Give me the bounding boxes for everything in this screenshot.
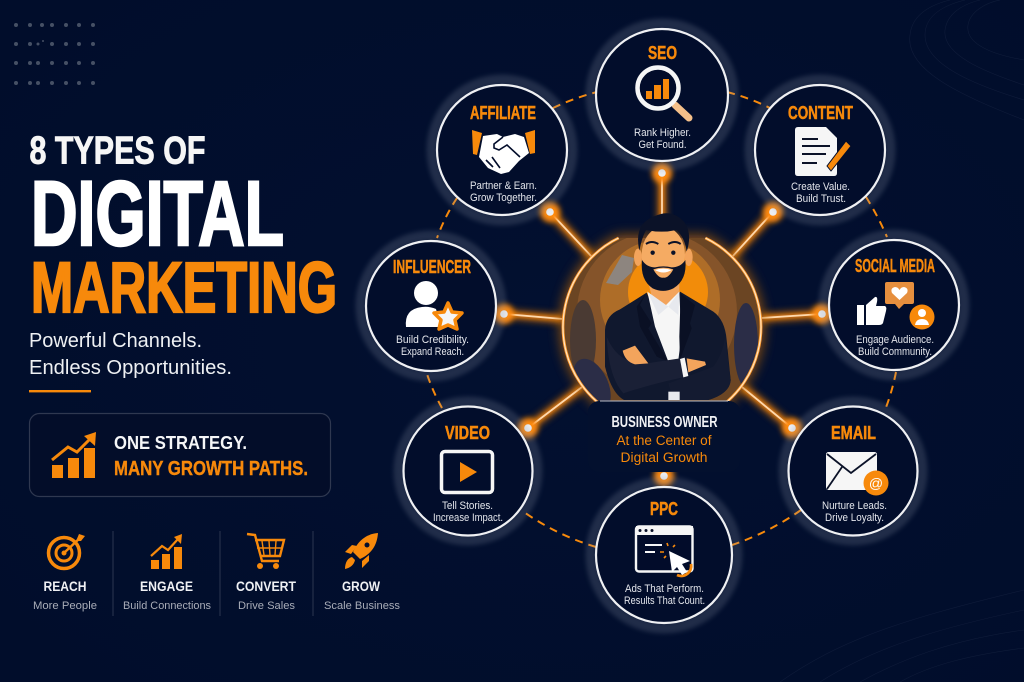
label: business owner: BUSINESS OWNER [612, 414, 718, 431]
channel: affiliate: Grow Together. [470, 192, 537, 204]
channel: email: Drive Loyalty. [825, 512, 884, 524]
benefit: convert [236, 534, 297, 612]
benefit: grow: GROW [342, 579, 380, 594]
contour lines decoration [780, 0, 1024, 682]
channel: video: Tell Stories. [442, 500, 493, 512]
channel: PPC: Results That Count. [624, 595, 705, 607]
title [30, 130, 337, 328]
channel: PPC: Ads That Perform. [625, 583, 704, 595]
channel: SEO: Get Found. [638, 139, 686, 151]
label: business owner [588, 401, 740, 472]
icon: handshake [472, 130, 535, 174]
channel: influencer: Expand Reach. [401, 346, 464, 358]
channel: PPC: PPC [650, 499, 678, 519]
channel: content [750, 80, 890, 220]
channel: SEO [591, 24, 733, 166]
benefit: convert: CONVERT [236, 579, 297, 594]
channel: content: Create Value. [791, 181, 850, 193]
channel: social media: Engage Audience. [856, 334, 934, 346]
icon: target [48, 534, 85, 568]
benefit: reach: More People [33, 600, 97, 612]
channel: social media [824, 235, 964, 375]
channel: email [784, 402, 922, 540]
dot grid decoration [14, 23, 95, 85]
channel: content: CONTENT [788, 103, 853, 123]
channel: influencer: INFLUENCER [393, 257, 471, 277]
strategy callout [30, 414, 330, 496]
benefit: engage: ENGAGE [140, 579, 193, 594]
label: business owner: At the Center of [616, 433, 712, 448]
channel: social media: SOCIAL MEDIA [855, 256, 935, 276]
benefit: engage [123, 534, 211, 612]
icon: rocket [345, 533, 378, 569]
channel: video: Increase Impact. [433, 512, 503, 524]
channel: video [399, 402, 537, 540]
central hub [563, 213, 761, 472]
channel: affiliate: Partner & Earn. [470, 180, 537, 192]
benefit: grow: Scale Business [324, 600, 400, 612]
benefit: convert: Drive Sales [238, 600, 295, 612]
icon: growth chart [52, 432, 96, 478]
channel: email: EMAIL [831, 423, 876, 443]
title: 8 TYPES OF [30, 130, 206, 172]
subtitle: Endless Opportunities. [29, 357, 232, 379]
benefit: grow [324, 533, 400, 612]
figure: business owner [605, 213, 731, 400]
dashed orbit connectors [427, 92, 896, 547]
icon: browser and cursor [636, 526, 693, 576]
benefit: reach [33, 534, 97, 612]
subtitle [29, 330, 232, 392]
subtitle: Powerful Channels. [29, 330, 202, 352]
icon: person with star [406, 281, 462, 329]
icon: shopping cart [247, 534, 284, 569]
benefit dividers [113, 531, 313, 616]
channel: email: Nurture Leads. [822, 500, 887, 512]
channel: influencer: Build Credibility. [396, 334, 469, 346]
channel: affiliate [432, 80, 572, 220]
spokes and glowing nodes [494, 163, 832, 486]
icon: document and pencil [795, 127, 851, 176]
icon: like, heart bubble, user [857, 282, 934, 330]
channel: influencer [361, 236, 501, 376]
benefit: reach: REACH [44, 579, 86, 594]
title: DIGITAL [31, 163, 284, 265]
channel: PPC [591, 482, 737, 628]
title: MARKETING [31, 249, 337, 328]
label: business owner: Digital Growth [620, 450, 708, 465]
channel: content: Build Trust. [796, 193, 846, 205]
channel: video: VIDEO [445, 423, 490, 443]
channel: SEO: Rank Higher. [634, 127, 691, 139]
icon: bar chart [151, 534, 182, 569]
icon: magnifier [638, 68, 689, 118]
channel: SEO: SEO [648, 43, 677, 63]
icon: envelope: @ [869, 475, 883, 491]
benefit: engage: Build Connections [123, 600, 211, 612]
strategy callout: ONE STRATEGY. [114, 432, 247, 453]
strategy callout: MANY GROWTH PATHS. [114, 458, 308, 480]
channel: social media: Build Community. [858, 346, 932, 358]
channel: affiliate: AFFILIATE [470, 103, 536, 123]
icon: play button [442, 452, 492, 492]
